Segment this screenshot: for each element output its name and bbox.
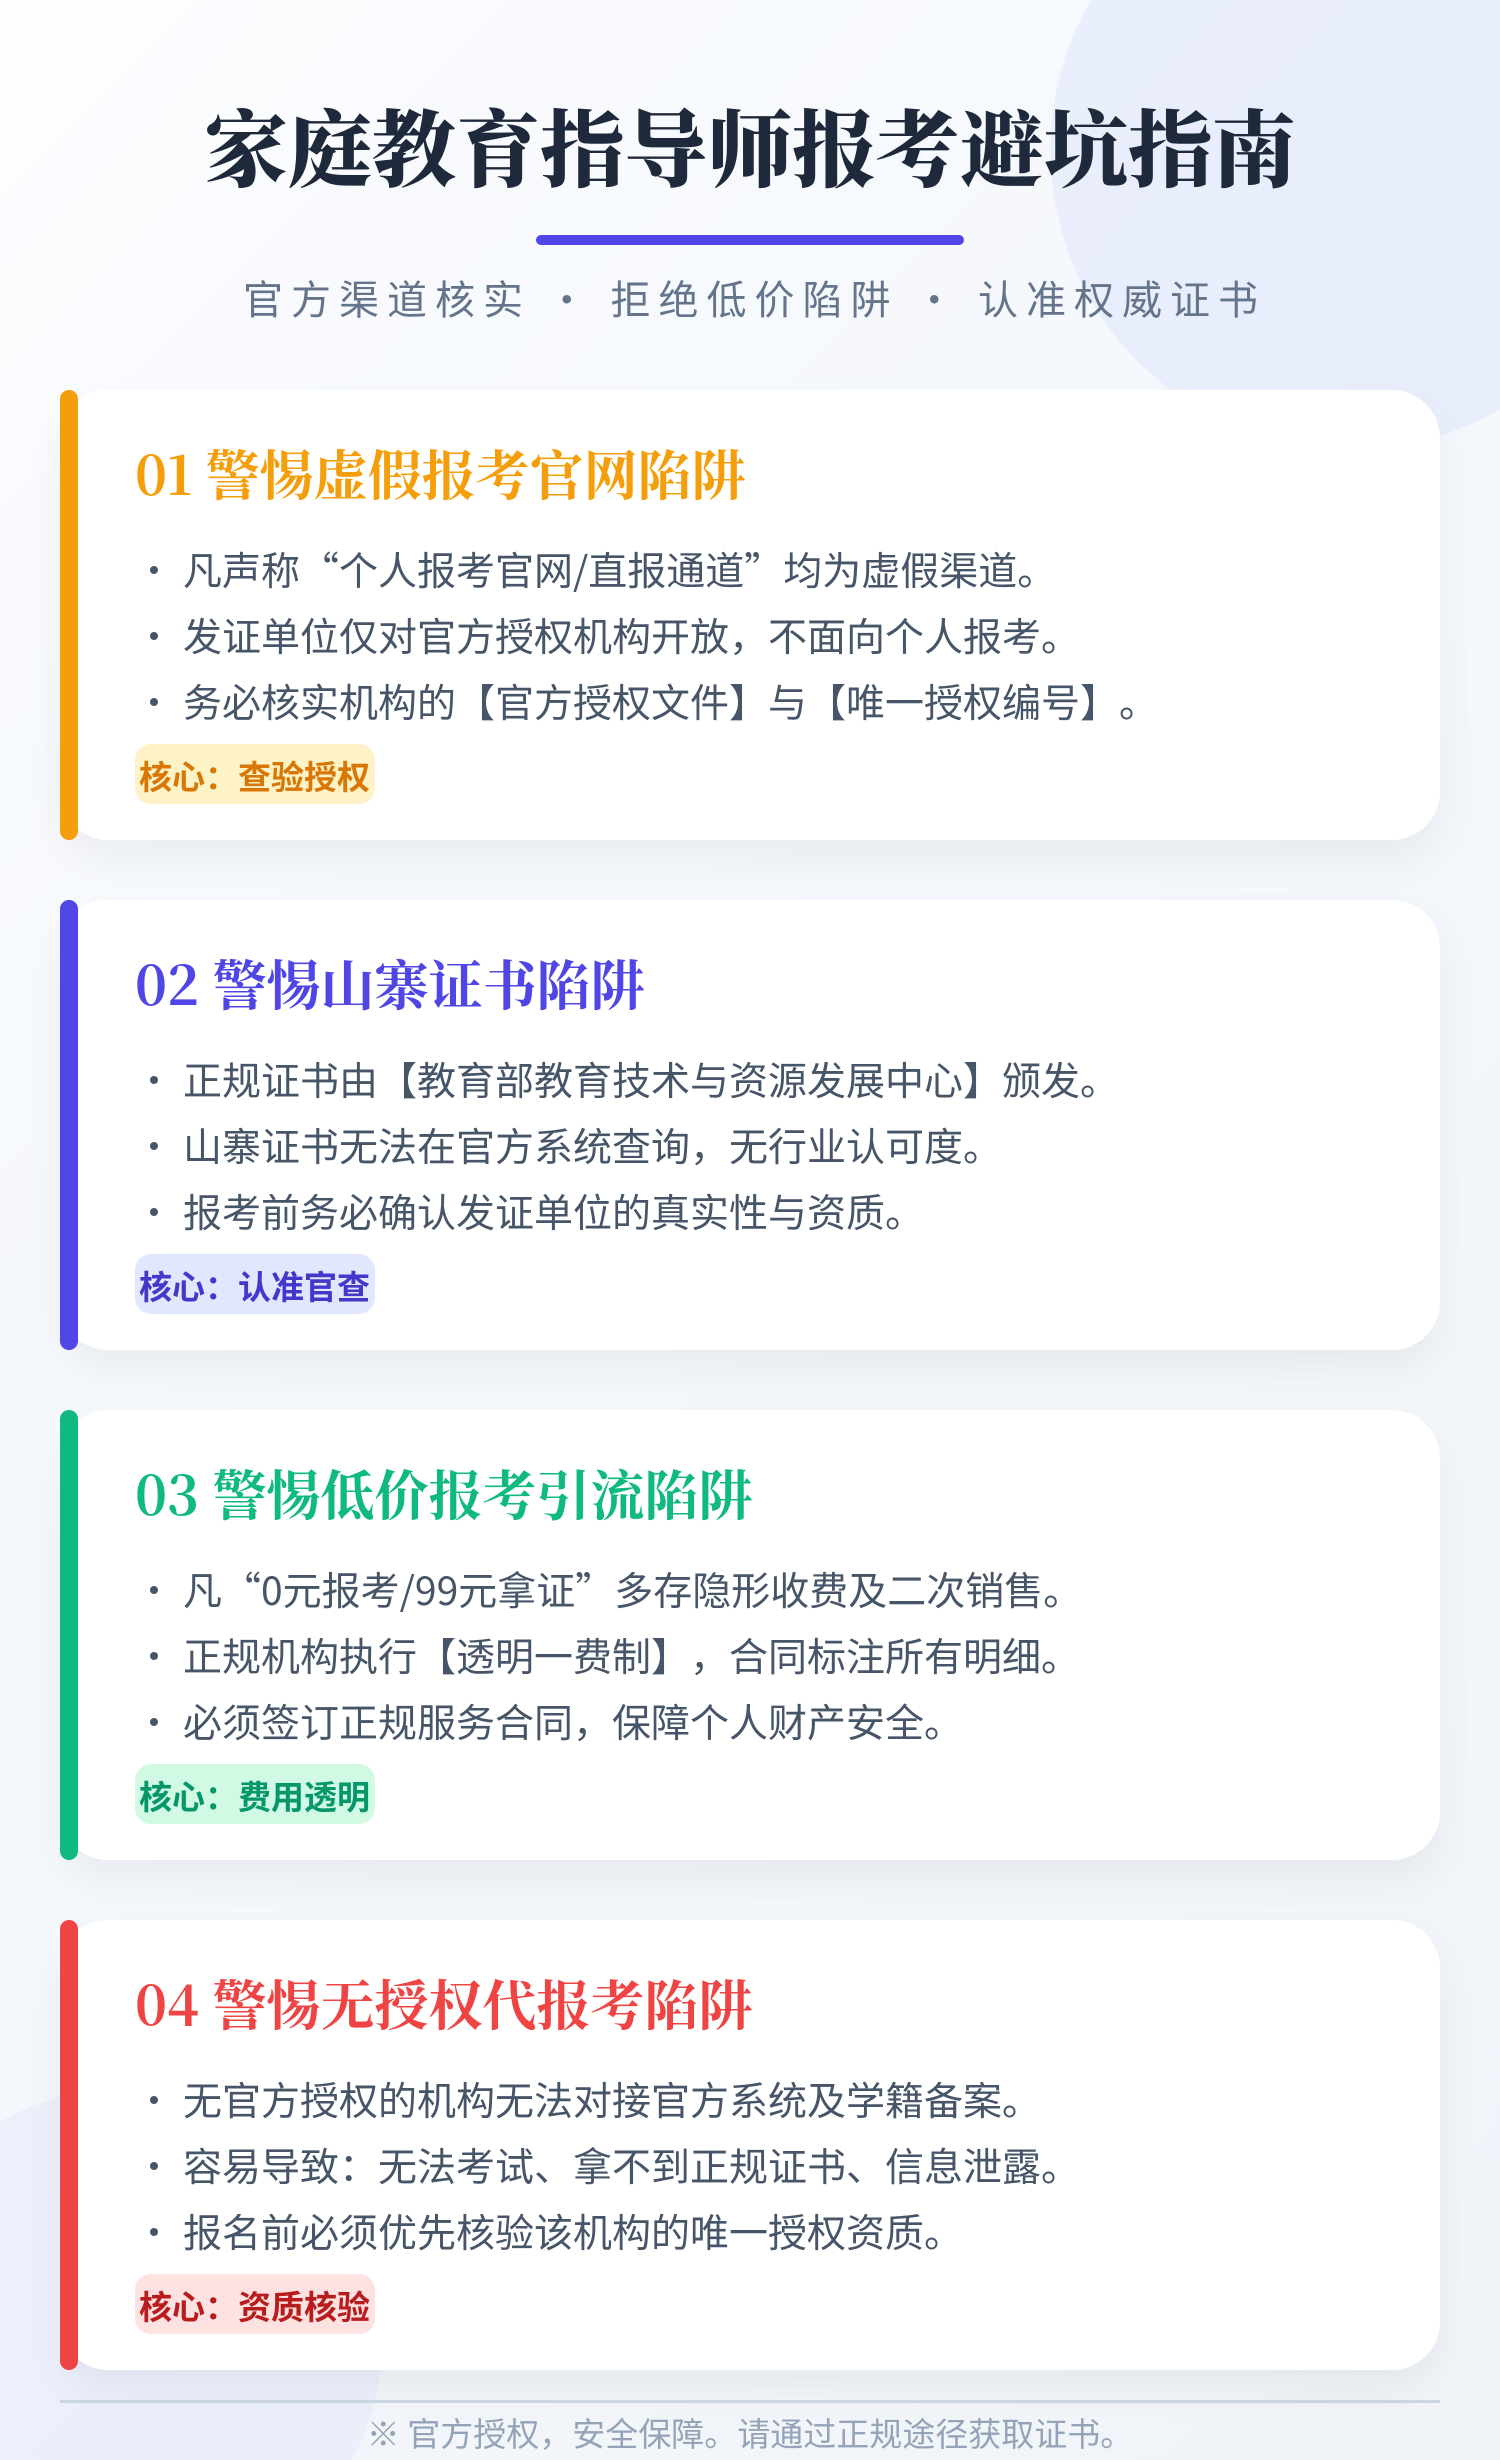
accent bar (60, 390, 78, 840)
bullet text: 凡“0元报考/99元拿证”多存隐形收费及二次销售。 (183, 1561, 1082, 1617)
subtitle: 官方渠道核实 · 拒绝低价陷阱 · 认准权威证书 (243, 268, 1266, 326)
bullet text: 正规机构执行【透明一费制】，合同标注所有明细。 (183, 1627, 1080, 1683)
bullet dot (150, 1076, 158, 1084)
bullet dot (150, 1586, 158, 1594)
panel: card 03 low price traps (60, 1410, 1440, 1860)
title: 家庭教育指导师报考避坑指南 (204, 84, 1296, 205)
panel: card 04 unauthorized agents (60, 1920, 1440, 2370)
title underline (536, 235, 964, 245)
card heading: 04 警惕无授权代报考陷阱 (135, 1964, 753, 2041)
bullet text: 报考前务必确认发证单位的真实性与资质。 (183, 1183, 924, 1239)
bullet text: 务必核实机构的【官方授权文件】与【唯一授权编号】。 (183, 673, 1158, 729)
panel: card 02 counterfeit certificates (60, 900, 1440, 1350)
core badge: 核心：认准官查 (139, 1261, 370, 1309)
core badge: 核心：查验授权 (139, 751, 370, 799)
card heading: 01 警惕虚假报考官网陷阱 (135, 434, 746, 511)
bullet text: 正规证书由【教育部教育技术与资源发展中心】颁发。 (183, 1051, 1119, 1107)
bullet dot (150, 566, 158, 574)
bullet dot (150, 1652, 158, 1660)
accent bar (60, 1920, 78, 2370)
bullet dot (150, 1208, 158, 1216)
bullet dot (150, 2228, 158, 2236)
card heading: 02 警惕山寨证书陷阱 (135, 944, 645, 1021)
bullet text: 必须签订正规服务合同，保障个人财产安全。 (183, 1693, 963, 1749)
card heading: 03 警惕低价报考引流陷阱 (135, 1454, 753, 1531)
bullet text: 发证单位仅对官方授权机构开放，不面向个人报考。 (183, 607, 1080, 663)
bullet dot (150, 1142, 158, 1150)
decorative circle: top right (1050, 0, 1500, 450)
core badge: 核心：费用透明 (139, 1771, 370, 1819)
bullet dot (150, 1718, 158, 1726)
footer note: ※ 官方授权，安全保障。请通过正规途径获取证书。 (367, 2408, 1133, 2456)
bullet dot (150, 2162, 158, 2170)
accent bar (60, 900, 78, 1350)
decorative circle: bottom left (0, 2087, 382, 2460)
bullet text: 报名前必须优先核验该机构的唯一授权资质。 (183, 2203, 963, 2259)
bullet dot (150, 2096, 158, 2104)
bullet dot (150, 632, 158, 640)
bullet text: 容易导致：无法考试、拿不到正规证书、信息泄露。 (183, 2137, 1080, 2193)
core badge: 核心：资质核验 (139, 2281, 370, 2329)
bullet dot (150, 698, 158, 706)
accent bar (60, 1410, 78, 1860)
bullet text: 山寨证书无法在官方系统查询，无行业认可度。 (183, 1117, 1002, 1173)
bullet text: 无官方授权的机构无法对接官方系统及学籍备案。 (183, 2071, 1041, 2127)
bullet text: 凡声称“个人报考官网/直报通道”均为虚假渠道。 (183, 541, 1056, 597)
panel: card 01 fake websites (60, 390, 1440, 840)
